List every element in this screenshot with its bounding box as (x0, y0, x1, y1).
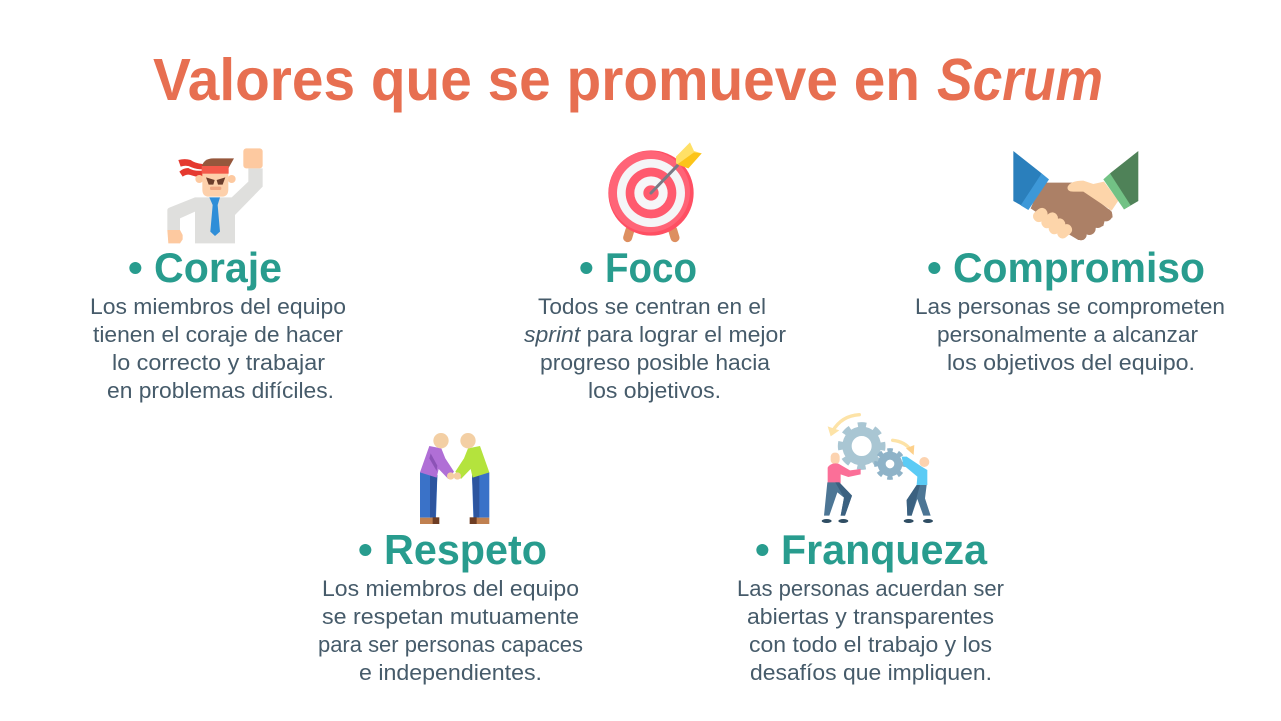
panel: respeto (318, 433, 583, 685)
text: compromiso: Las personas se comprometen (915, 294, 1225, 319)
panel: respeto: Respeto (384, 526, 547, 573)
panel: compromiso (915, 151, 1225, 375)
text: compromiso: personalmente a alcanzar (937, 322, 1198, 347)
text: respeto: se respetan mutuamente (322, 604, 579, 629)
panel: coraje (90, 148, 346, 403)
icon: target with arrow (608, 142, 702, 238)
text: respeto (318, 576, 583, 685)
heading: franqueza: • (755, 526, 770, 573)
text: franqueza: abiertas y transparentes (747, 604, 994, 629)
text: respeto: e independientes. (359, 660, 542, 685)
panel: franqueza: Franqueza (781, 526, 988, 573)
text: foco: Todos se centran en el (538, 294, 766, 319)
text: respeto: para ser personas capaces (318, 632, 583, 657)
heading: respeto: • (358, 526, 373, 573)
heading: compromiso: • (927, 244, 942, 291)
text: respeto: Los miembros del equipo (322, 576, 579, 601)
text: coraje: tienen el coraje de hacer (93, 322, 343, 347)
text: coraje (90, 294, 346, 403)
text: foco: sprint para lograr el mejor (524, 322, 786, 347)
panel: coraje: Coraje (154, 244, 282, 291)
heading: coraje: • (128, 244, 143, 291)
panel: foco: Foco (605, 244, 697, 291)
icon: two people bowing (420, 433, 489, 524)
icon: determined man (167, 148, 263, 243)
panel: foco (524, 142, 786, 403)
text: franqueza: Las personas acuerdan ser (737, 576, 1004, 601)
text: coraje: en problemas difíciles. (107, 378, 334, 403)
text: foco: los objetivos. (588, 378, 721, 403)
title: Scrum (937, 47, 1103, 113)
icon: handshake (1013, 151, 1138, 241)
text: compromiso: los objetivos del equipo. (947, 350, 1195, 375)
panel: compromiso: Compromiso (953, 244, 1205, 291)
text: coraje: Los miembros del equipo (90, 294, 346, 319)
text: franqueza (737, 576, 1004, 685)
heading: foco: • (579, 244, 594, 291)
panel: franqueza (737, 415, 1004, 685)
icon: people turning gears (822, 415, 933, 523)
text: coraje: lo correcto y trabajar (112, 350, 325, 375)
text: franqueza: desafíos que impliquen. (750, 660, 992, 685)
text: compromiso (915, 294, 1225, 375)
text: foco (524, 294, 786, 403)
text: foco: progreso posible hacia (540, 350, 771, 375)
title: Valores que se promueve en (153, 47, 920, 113)
text: franqueza: con todo el trabajo y los (749, 632, 992, 657)
